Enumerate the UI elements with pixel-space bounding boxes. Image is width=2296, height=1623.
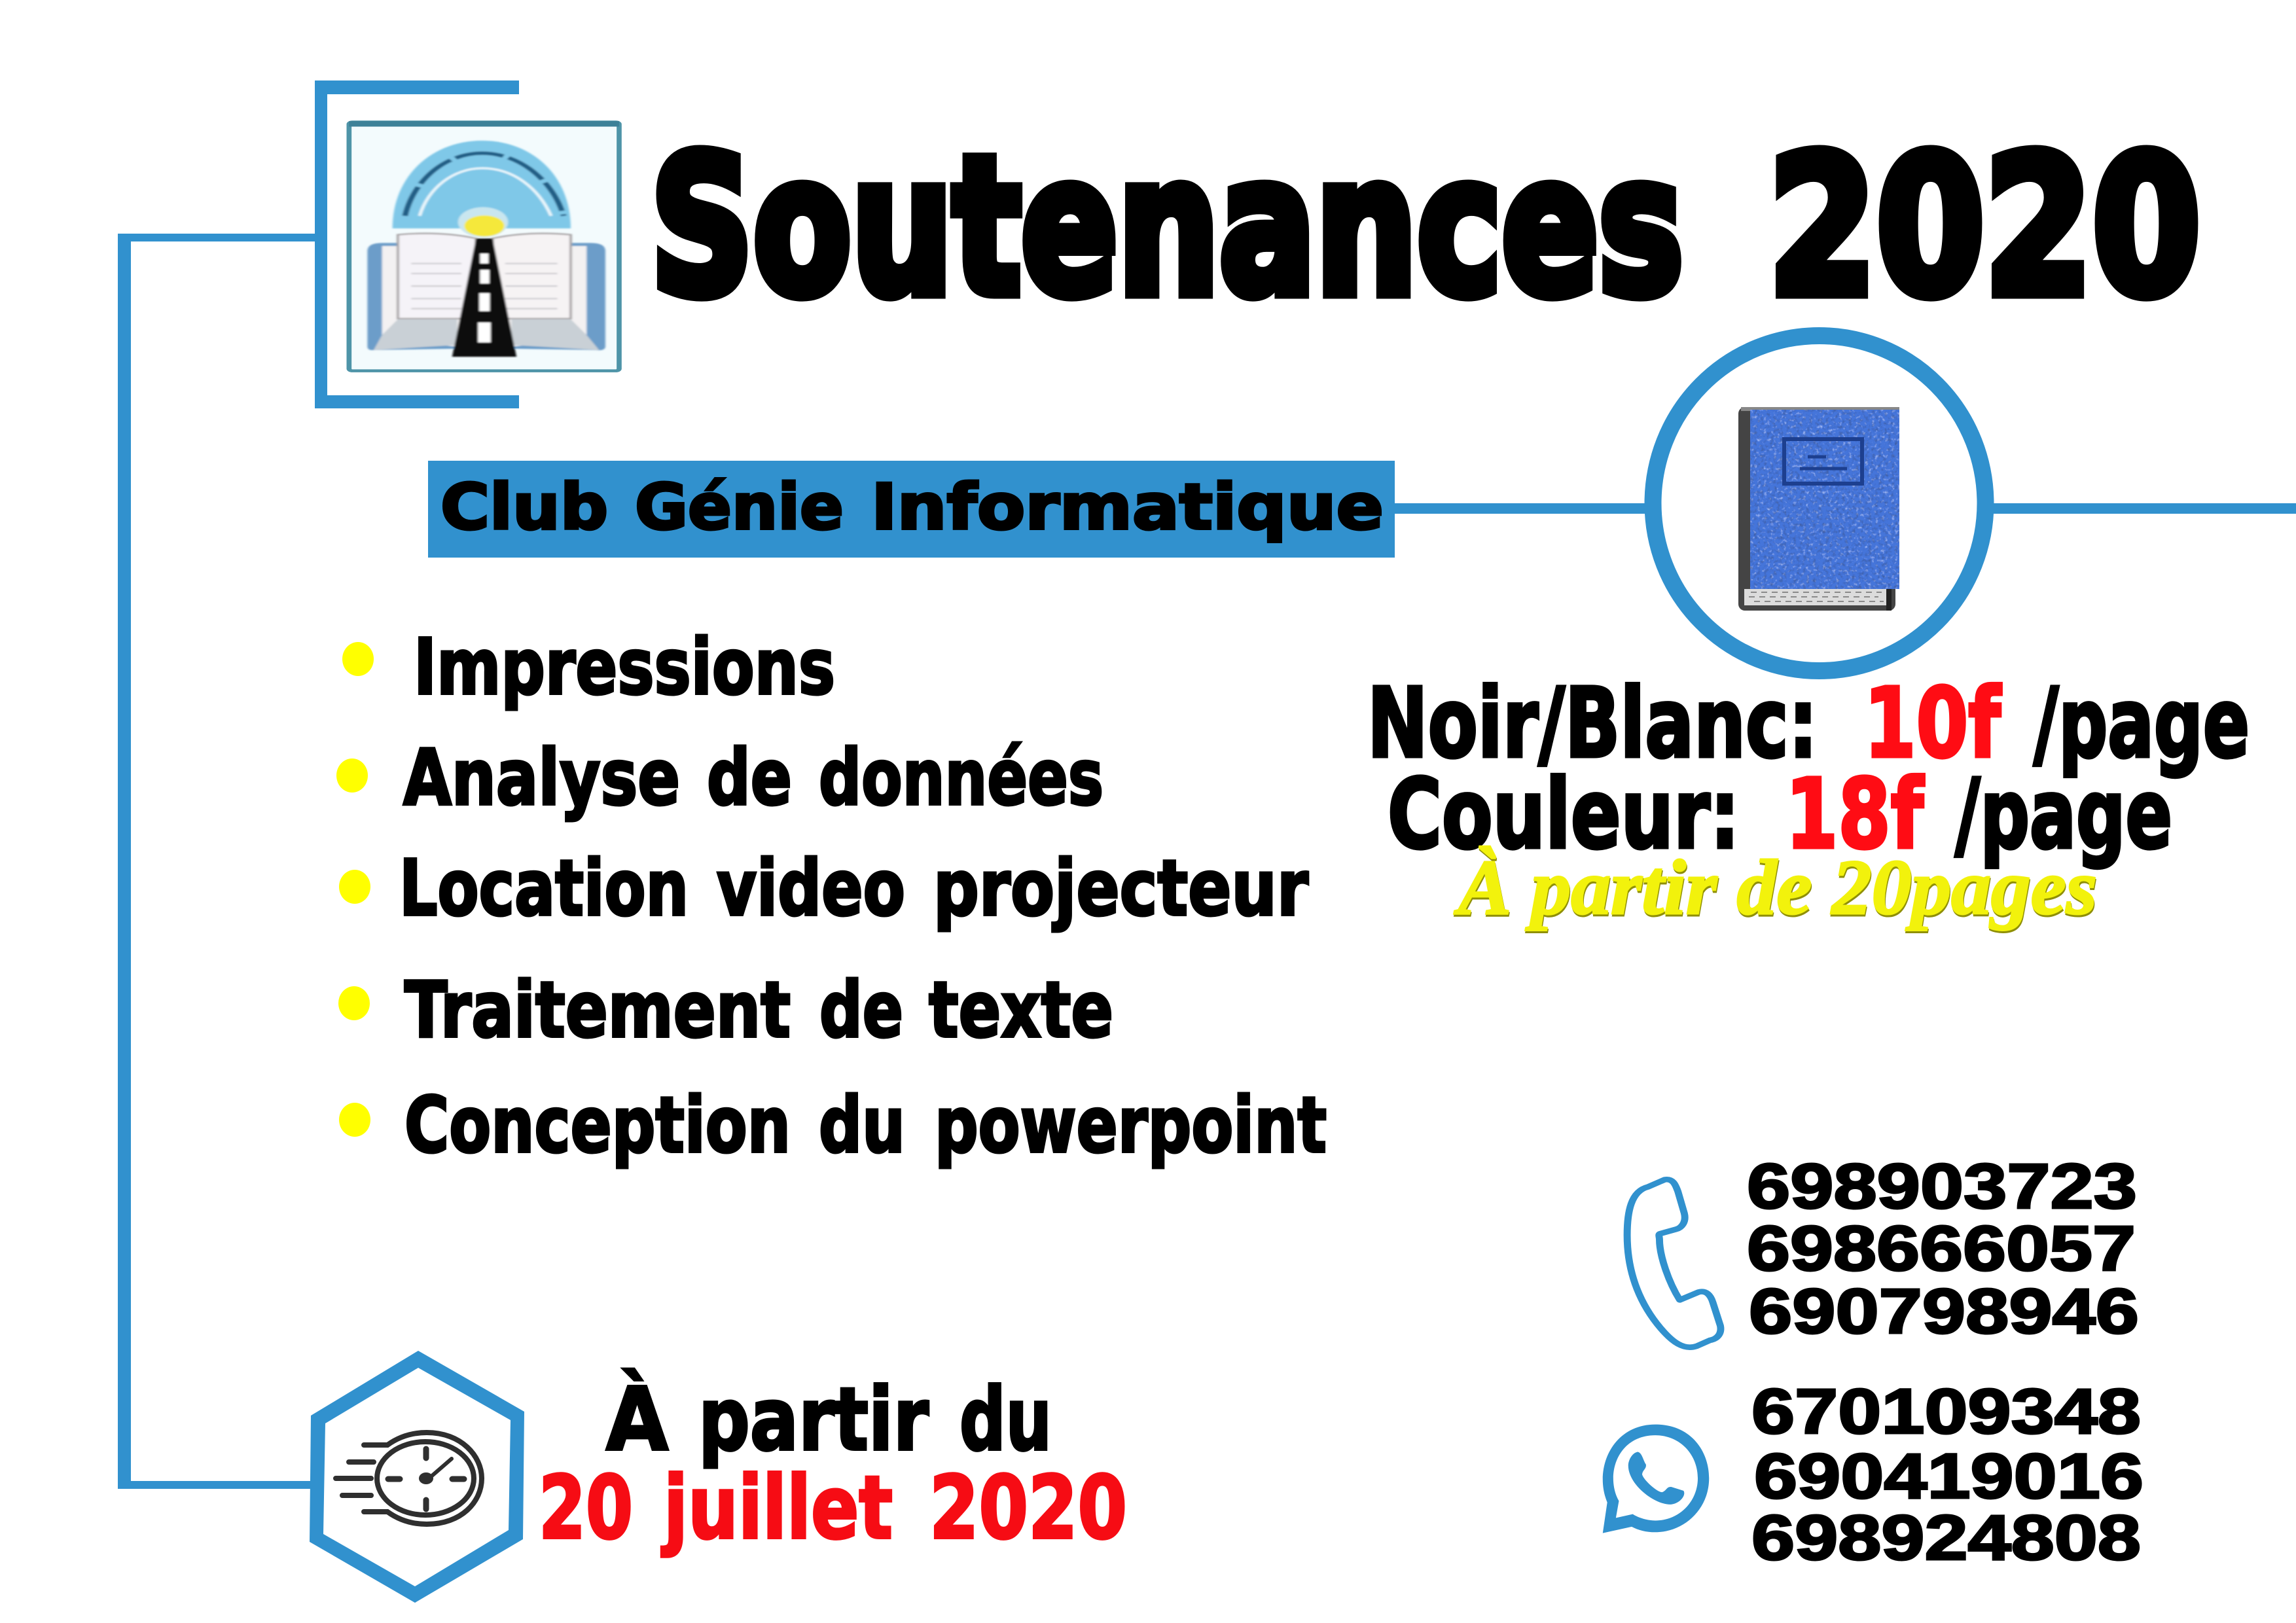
bullet and item: Location video projecteur: video bbox=[717, 843, 905, 933]
phone numbers: 698903723 bbox=[1747, 1150, 2137, 1222]
start date: partir bbox=[698, 1370, 929, 1471]
banner: club name bbox=[428, 461, 1395, 558]
logo: open book and road bbox=[349, 121, 619, 371]
bullet and item: Impressions: Impressions bbox=[414, 622, 835, 712]
whatsapp numbers bbox=[1751, 1376, 2144, 1573]
logo bracket bbox=[315, 80, 519, 408]
bullet and item: Conception du powerpoint: Conception bbox=[404, 1080, 791, 1170]
start date: 2020 bbox=[929, 1458, 1127, 1559]
title: Soutenances bbox=[651, 116, 1683, 338]
banner: club name: Informatique bbox=[871, 471, 1384, 544]
bullet and item: Location video projecteur bbox=[339, 843, 1308, 933]
start date: juillet bbox=[661, 1458, 893, 1559]
price: colour: 18f bbox=[1785, 758, 1925, 870]
whatsapp numbers: 698924808 bbox=[1751, 1502, 2141, 1573]
price: colour: Couleur: bbox=[1388, 758, 1740, 870]
bullet and item: Conception du powerpoint: powerpoint bbox=[935, 1080, 1327, 1170]
service list bbox=[336, 622, 1327, 1170]
start date: du bbox=[960, 1370, 1052, 1471]
circle: book icon bbox=[1653, 336, 1986, 671]
phone numbers: 698666057 bbox=[1747, 1213, 2136, 1284]
whatsapp numbers: 690419016 bbox=[1754, 1440, 2144, 1512]
whatsapp icon bbox=[1603, 1425, 1709, 1533]
whatsapp numbers: 670109348 bbox=[1751, 1376, 2141, 1447]
bullet and item: Traitement de texte: de bbox=[819, 965, 903, 1055]
start date bbox=[539, 1368, 1127, 1559]
hexagon: clock icon bbox=[310, 1351, 524, 1603]
phone icon bbox=[1627, 1179, 1721, 1347]
bullet and item: Analyse de données bbox=[336, 732, 1103, 823]
price: black and white: 10f bbox=[1864, 668, 2002, 779]
phone numbers bbox=[1747, 1150, 2139, 1347]
price: black and white bbox=[1367, 668, 2250, 779]
phone numbers: 690798946 bbox=[1749, 1275, 2139, 1347]
start date: À bbox=[606, 1368, 668, 1471]
bullet and item: Conception du powerpoint bbox=[339, 1080, 1327, 1170]
banner: club name: Génie bbox=[635, 471, 844, 544]
bullet and item: Analyse de données: de bbox=[707, 732, 792, 823]
start date: 20 bbox=[539, 1458, 633, 1559]
price: black and white: Noir/Blanc: bbox=[1367, 668, 1818, 779]
banner: club name: Club bbox=[440, 471, 608, 544]
title: 2020 bbox=[1768, 116, 2200, 338]
bullet and item: Traitement de texte: texte bbox=[929, 965, 1113, 1055]
bullet and item: Traitement de texte bbox=[338, 965, 1113, 1055]
bullet and item: Location video projecteur: projecteur bbox=[933, 843, 1308, 933]
bullet and item: Conception du powerpoint: du bbox=[819, 1080, 905, 1170]
bullet and item: Analyse de données: Analyse bbox=[403, 732, 680, 823]
connector lines bbox=[118, 234, 2296, 1489]
price: colour bbox=[1388, 758, 2172, 870]
price: colour: /page bbox=[1955, 758, 2172, 870]
bullet and item: Location video projecteur: Location bbox=[399, 843, 689, 933]
bullet and item: Traitement de texte: Traitement bbox=[404, 965, 791, 1055]
bullet and item: Analyse de données: données bbox=[819, 732, 1103, 823]
minimum pages note: À partir de 20pages bbox=[1454, 844, 2097, 931]
